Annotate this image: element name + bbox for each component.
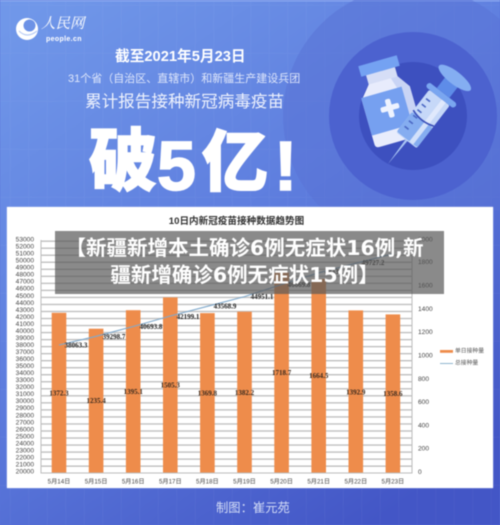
left axis labels: 49000 <box>16 265 34 272</box>
left axis labels: 24000 <box>16 440 34 447</box>
line: total doses <box>59 254 393 345</box>
panel: chart card <box>7 207 493 488</box>
left axis labels: 37000 <box>16 349 34 356</box>
credit: 制图：崔元苑 <box>216 501 290 515</box>
gridlines <box>41 240 412 473</box>
text: scope of provinces: 31个省（自治区、直辖市）和新疆生产建设兵团 <box>68 72 300 84</box>
headline: over 500 million: 5 <box>157 127 196 205</box>
chart title: 10日内新冠疫苗接种数据趋势图 <box>169 215 304 227</box>
left axis labels: 26000 <box>16 426 34 433</box>
right axis labels: 800 <box>418 376 429 383</box>
line value labels: 49727.2 <box>362 259 385 267</box>
left axis labels: 36000 <box>16 356 34 363</box>
left axis labels: 30000 <box>16 398 34 405</box>
line value labels: 43568.9 <box>214 302 237 310</box>
right axis labels: 1000 <box>418 352 433 360</box>
left axis labels: 40000 <box>16 328 34 335</box>
left axis labels: 47000 <box>16 279 34 286</box>
right axis labels: 400 <box>418 422 429 429</box>
x axis labels <box>48 478 404 486</box>
left axis labels: 38000 <box>16 342 34 349</box>
x axis labels: 5月14日 <box>48 478 70 486</box>
overlay banner: news headline <box>55 231 444 294</box>
left axis labels: 46000 <box>16 286 34 293</box>
left axis labels: 22000 <box>16 454 34 461</box>
left axis labels: 34000 <box>16 370 34 377</box>
left axis labels: 48000 <box>16 272 34 279</box>
bar value labels <box>49 369 403 405</box>
bar value labels: 1235.4 <box>86 397 106 405</box>
banner line 2: 疆新增确诊6例无症状15例】 <box>110 263 379 287</box>
x axis labels: 5月20日 <box>270 478 293 486</box>
bar value labels: 1369.8 <box>198 390 218 398</box>
headline: over 500 million: ! <box>274 127 297 205</box>
line value labels <box>65 259 385 350</box>
headline: over 500 million <box>88 124 297 205</box>
x axis labels: 5月18日 <box>196 478 219 486</box>
x axis labels: 5月16日 <box>122 478 145 486</box>
bar value labels: 1358.6 <box>383 390 403 398</box>
line value labels: 39298.7 <box>103 333 126 341</box>
logo: people.cn <box>15 16 87 43</box>
left axis labels <box>16 236 34 476</box>
concentric circles behind vaccine <box>284 0 497 200</box>
right axis labels: 1400 <box>418 306 433 313</box>
left axis labels: 35000 <box>16 363 34 370</box>
line value labels: 46669.8 <box>288 281 311 289</box>
right axis labels <box>418 236 433 476</box>
bar value labels: 1505.3 <box>161 382 180 390</box>
right axis labels: 1600 <box>418 282 433 290</box>
bar value labels: 1395.1 <box>124 388 143 396</box>
banner line 1: 【新疆新增本土确诊6例无症状16例,新 <box>65 236 424 260</box>
left axis labels: 52000 <box>16 244 34 250</box>
right axis labels: 200 <box>418 446 429 452</box>
bar value labels: 1718.7 <box>272 369 292 377</box>
left axis labels: 41000 <box>16 321 34 328</box>
line value labels: 44951.1 <box>251 293 274 301</box>
left axis labels: 31000 <box>16 391 34 398</box>
left axis labels: 23000 <box>16 447 34 454</box>
line value labels: 42199.1 <box>177 313 200 321</box>
legend: 总接种量 <box>455 358 478 366</box>
right axis labels: 600 <box>418 399 429 406</box>
x axis labels: 5月17日 <box>159 478 182 486</box>
x axis labels: 5月15日 <box>85 478 107 486</box>
right axis labels: 1200 <box>418 329 433 336</box>
headline: over 500 million: 亿 <box>202 125 268 199</box>
left axis labels: 32000 <box>16 384 34 391</box>
right axis labels: 1800 <box>418 259 433 266</box>
icon: vaccine vial <box>358 55 416 148</box>
text: cumulative vaccination: 累计报告接种新冠病毒疫苗 <box>85 92 284 111</box>
logo emblem <box>15 17 39 41</box>
left axis labels: 50000 <box>16 258 34 265</box>
left axis labels: 51000 <box>16 251 34 258</box>
right axis labels: 2000 <box>418 236 433 244</box>
left axis labels: 44000 <box>16 300 34 307</box>
heading: date: 截至2021年5月23日 <box>115 49 246 65</box>
x axis labels: 5月19日 <box>233 478 256 486</box>
x axis labels: 5月23日 <box>382 478 404 486</box>
headline: over 500 million: 破 <box>89 124 157 200</box>
bar value labels: 1664.5 <box>309 372 329 380</box>
left axis labels: 27000 <box>16 419 34 426</box>
left axis labels: 43000 <box>16 307 34 314</box>
left axis labels: 42000 <box>16 314 34 321</box>
logo wordmark: 人民网 <box>41 16 84 32</box>
legend <box>440 346 484 366</box>
left axis labels: 29000 <box>16 405 34 412</box>
x axis labels: 5月22日 <box>344 478 367 486</box>
left axis labels: 28000 <box>16 412 34 419</box>
bar value labels: 1372.3 <box>49 390 69 398</box>
bars: daily doses <box>52 273 400 472</box>
logo url: people.cn <box>46 36 82 43</box>
line value labels: 38063.3 <box>65 342 88 350</box>
left axis labels: 45000 <box>16 293 34 300</box>
right axis labels: 0 <box>418 469 422 476</box>
bar value labels: 1382.2 <box>235 389 255 397</box>
left axis labels: 53000 <box>16 236 34 244</box>
icon: syringe <box>388 64 472 163</box>
left axis labels: 21000 <box>16 462 34 468</box>
line value labels: 40693.8 <box>140 323 163 331</box>
line value labels: 48334.3 <box>325 268 348 276</box>
x axis labels: 5月21日 <box>307 478 330 486</box>
bar value labels: 1392.9 <box>346 388 366 396</box>
legend: 单日接种量 <box>455 346 484 354</box>
left axis labels: 39000 <box>16 335 34 342</box>
left axis labels: 25000 <box>16 433 34 440</box>
left axis labels: 20000 <box>16 468 34 476</box>
left axis labels: 33000 <box>16 377 34 384</box>
